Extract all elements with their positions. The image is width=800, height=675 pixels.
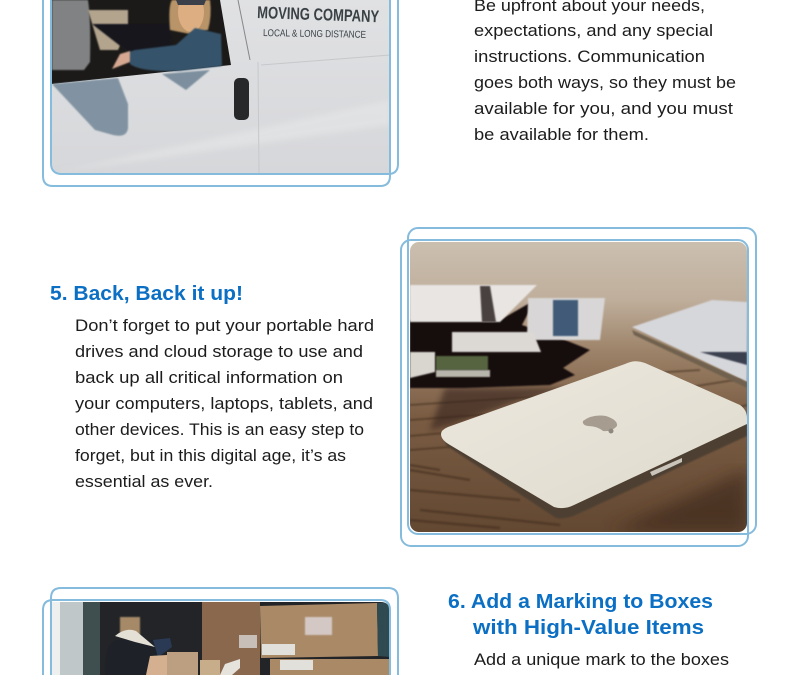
step 5 body text: Don’t forget to put your portable hard bbox=[75, 317, 374, 335]
step 4 body text: be available for them. bbox=[474, 126, 649, 144]
photo frames bbox=[43, 588, 398, 675]
photo frames bbox=[401, 228, 756, 546]
step 5 body text bbox=[75, 317, 374, 491]
van lettering: LOCAL & LONG DISTANCE bbox=[263, 28, 366, 41]
step 4 body text: goes both ways, so they must be bbox=[474, 74, 736, 92]
step 6 heading: with High-Value Items bbox=[472, 617, 704, 639]
step 6 heading: 6. Add a Marking to Boxes bbox=[448, 591, 713, 613]
step 5 body text: drives and cloud storage to use and bbox=[75, 343, 363, 361]
step 5 heading: 5. Back, Back it up! bbox=[50, 283, 243, 305]
step 6 body text: Add a unique mark to the boxes bbox=[474, 651, 729, 669]
step 6 heading bbox=[448, 591, 713, 639]
step 4 body text bbox=[474, 0, 736, 144]
step 4 body text: expectations, and any special bbox=[474, 22, 713, 40]
step 5 body text: your computers, laptops, tablets, and bbox=[75, 395, 373, 413]
van lettering: MOVING COMPANY bbox=[257, 3, 380, 26]
step 5 body text: essential as ever. bbox=[75, 473, 213, 491]
photo: laptop and devices on table bbox=[401, 228, 756, 546]
step 5 body text: other devices. This is an easy step to bbox=[75, 421, 364, 439]
step 5 body text: back up all critical information on bbox=[75, 369, 343, 387]
step 4 body text: instructions. Communication bbox=[474, 48, 705, 66]
photo frames bbox=[43, 0, 398, 186]
photo: worker checking boxes in van bbox=[43, 588, 398, 675]
van lettering bbox=[258, 6, 380, 38]
photo: moving van driver bbox=[43, 0, 398, 186]
step 5 body text: forget, but in this digital age, it’s as bbox=[75, 447, 346, 465]
step 4 body text: available for you, and you must bbox=[474, 100, 733, 118]
